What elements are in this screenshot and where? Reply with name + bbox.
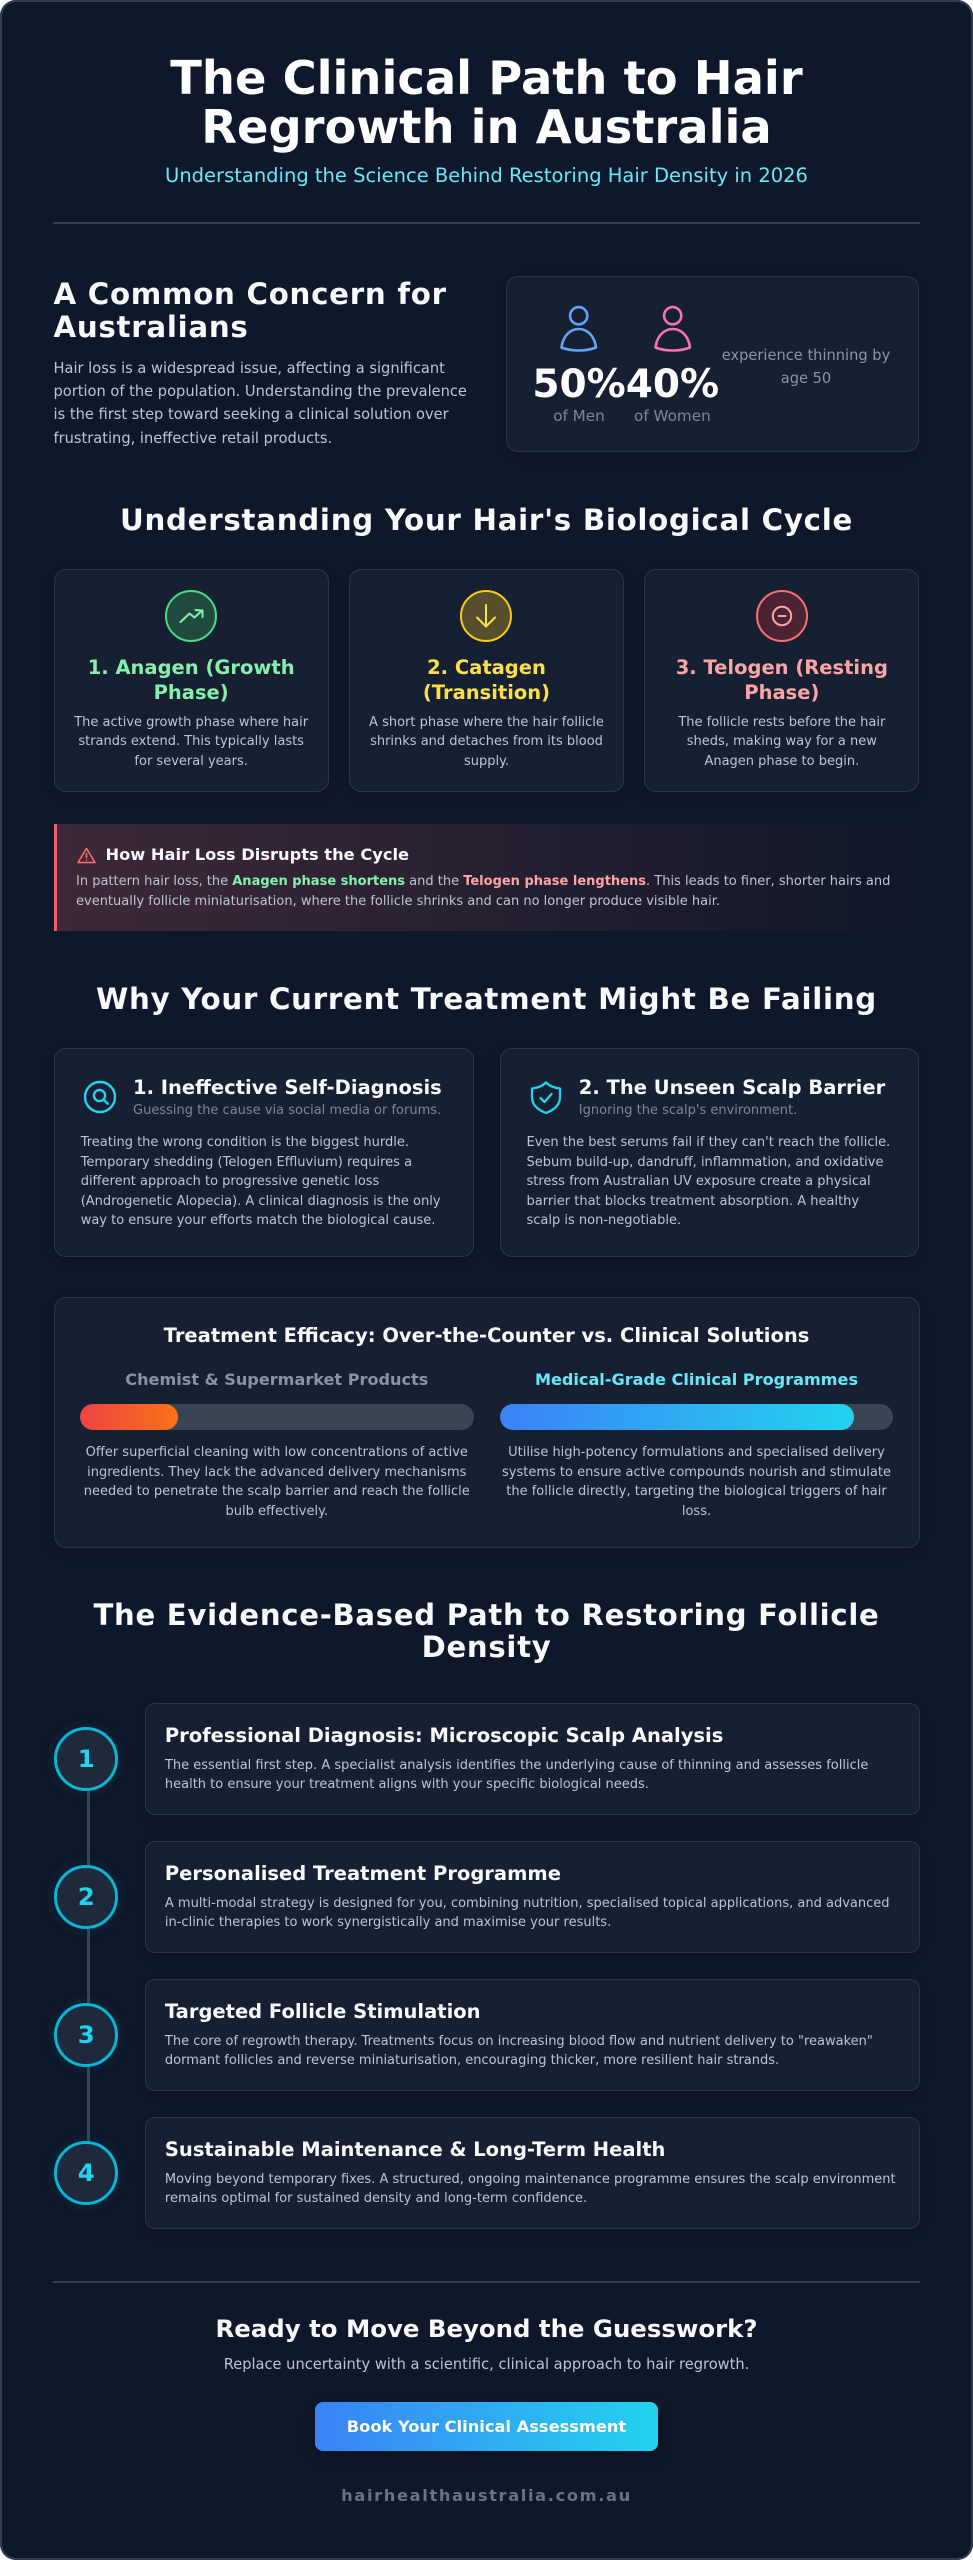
- text: anagen: strands extend. This typically lasts: [78, 734, 304, 749]
- text: chemist products: bulb effectively.: [226, 1504, 328, 1518]
- text: self-diagnosis: Temporary shedding (Telogen Effluvium) requires a: [81, 1154, 412, 1170]
- text: telogen: [678, 715, 886, 769]
- cta heading: Ready to Move Beyond the Guesswork?: [216, 2314, 757, 2343]
- paragraph: prevalence: [54, 360, 467, 447]
- label: chemist products: Chemist & Supermarket Products: [125, 1370, 428, 1389]
- step number 2: 2: [78, 1882, 95, 1911]
- text: clinical programmes: loss.: [682, 1504, 711, 1518]
- text: clinical programmes: Utilise high-potency formulations and specialised delivery: [508, 1445, 885, 1460]
- step 1 text: health to ensure your treatment aligns with your specific biological needs.: [165, 1777, 649, 1792]
- panel: ineffective self-diagnosis: [54, 1048, 474, 1257]
- step 3 heading: Targeted Follicle Stimulation: [165, 2000, 481, 2023]
- text: clinical programmes: the follicle directly, targeting the biological triggers of hair: [506, 1484, 887, 1499]
- bar: chemist efficacy: [80, 1404, 474, 1430]
- text: catagen: supply.: [464, 754, 509, 769]
- text: catagen: [369, 715, 604, 769]
- text: clinical programmes: [502, 1445, 891, 1518]
- heading: catagen: (Transition): [423, 681, 550, 704]
- paragraph: prevalence: Hair loss is a widespread issue, affecting a significant: [54, 360, 445, 376]
- text: anagen: for several years.: [134, 754, 248, 769]
- paragraph: prevalence: is the first step toward seeking a clinical solution over: [54, 406, 449, 423]
- step number 3: 3: [78, 2020, 95, 2049]
- heading: anagen: [88, 656, 295, 704]
- text: catagen: shrinks and detaches from its blood: [370, 734, 603, 749]
- panel: prevalence stats: [506, 276, 919, 452]
- text: self-diagnosis: different approach to progressive genetic loss: [81, 1174, 379, 1189]
- heading: a common concern: Australians: [54, 310, 249, 344]
- heading: a common concern: A Common Concern for: [54, 277, 447, 311]
- title: The Clinical Path to Hair: [170, 51, 803, 105]
- step number 1: [54, 1727, 118, 1791]
- icon: warning triangle: [77, 848, 96, 864]
- heading: evidence-based path: The Evidence-Based Path to Restoring Follicle: [93, 1598, 880, 1632]
- label: clinical programmes: Medical-Grade Clinical Programmes: [535, 1370, 858, 1389]
- callout text: In pattern hair loss, the Anagen phase shortens and the Telogen phase lengthens. This leads to finer, shorter hairs and: [76, 874, 890, 889]
- step 3 text: [164, 2034, 873, 2068]
- heading: anagen: 1. Anagen (Growth: [88, 656, 295, 679]
- text: chemist products: needed to penetrate the scalp barrier and reach the follicle: [84, 1484, 470, 1499]
- step card 4: [144, 2117, 920, 2229]
- timeline: four steps: [54, 1703, 920, 2229]
- text: anagen: [74, 715, 308, 769]
- heading: scalp barrier: 2. The Unseen Scalp Barrier: [579, 1076, 885, 1099]
- text: self-diagnosis: (Androgenetic Alopecia). A clinical diagnosis is the only: [81, 1194, 441, 1208]
- caption: experience thinning: [722, 347, 890, 387]
- panel: unseen scalp barrier: [500, 1048, 919, 1257]
- step number 2: [54, 1865, 118, 1929]
- step 1 text: The essential first step. A specialist analysis identifies the underlying cause of thinning and assesses follicle: [165, 1758, 868, 1773]
- heading: anagen: Phase): [154, 681, 229, 704]
- heading: catagen: 2. Catagen: [427, 656, 546, 679]
- step number 4: 4: [78, 2158, 95, 2187]
- step card 1: [144, 1703, 920, 1815]
- caption: experience thinning: experience thinning by: [722, 347, 890, 364]
- step 4 text: Moving beyond temporary fixes. A structured, ongoing maintenance programme ensures the scalp environment: [165, 2172, 896, 2187]
- text block: a common concern: [54, 277, 467, 447]
- number: 50 percent: 50%: [532, 362, 626, 407]
- step 1 text: [164, 1758, 868, 1792]
- website footer: hairhealthaustralia.com.au: [341, 2486, 632, 2505]
- step 2 text: A multi-modal strategy is designed for you, combining nutrition, specialised topical applications, and advanced: [165, 1896, 890, 1911]
- text: scalp barrier: barrier that blocks treatment absorption. A healthy: [526, 1194, 859, 1208]
- bar: clinical efficacy: [500, 1404, 893, 1430]
- icon: rest circle: [756, 590, 808, 642]
- text: chemist products: [84, 1445, 470, 1518]
- text: anagen: The active growth phase where hair: [74, 715, 308, 730]
- number: 40 percent: 40%: [626, 362, 719, 407]
- panel: telogen: [644, 569, 919, 792]
- text: self-diagnosis: [80, 1135, 441, 1228]
- text: scalp barrier: Even the best serums fail if they can't reach the follicle.: [526, 1135, 890, 1150]
- call to action: [216, 2314, 757, 2505]
- step 4 text: [165, 2172, 896, 2206]
- title: Regrowth in Australia: [201, 100, 772, 154]
- text: chemist products: Offer superficial cleaning with low concentrations of active: [86, 1445, 468, 1460]
- cta button: [315, 2402, 658, 2451]
- step number 3: [54, 2003, 118, 2067]
- stat: men: [532, 306, 626, 425]
- icon: magnifier: [84, 1080, 116, 1114]
- heading: why treatment fails: Why Your Current Treatment Might Be Failing: [96, 982, 877, 1016]
- heading: catagen: [423, 656, 550, 704]
- callout: how hair loss disrupts the cycle: [54, 824, 920, 931]
- stat: women: [626, 306, 719, 425]
- callout text: [76, 874, 890, 909]
- step 2 text: [165, 1896, 890, 1930]
- icon: woman: [654, 306, 692, 352]
- callout text: eventually follicle miniaturisation, where the follicle shrinks and can no longer produce visible hair.: [76, 894, 720, 909]
- heading: a common concern: [54, 277, 447, 344]
- step 4 heading: Sustainable Maintenance & Long-Term Health: [165, 2138, 665, 2161]
- step 3 text: The core of regrowth therapy. Treatments focus on increasing blood flow and nutrient delivery to "reawaken": [165, 2034, 873, 2049]
- paragraph: prevalence: frustrating, ineffective retail products.: [54, 430, 332, 447]
- text: catagen: A short phase where the hair follicle: [369, 715, 604, 730]
- step number 1: 1: [78, 1744, 95, 1773]
- text: self-diagnosis: way to ensure your efforts match the biological cause.: [81, 1213, 435, 1228]
- subheading: self-diagnosis: Guessing the cause via social media or forums.: [133, 1102, 441, 1118]
- cta text: Replace uncertainty with a scientific, clinical approach to hair regrowth.: [224, 2356, 749, 2373]
- text: telogen: sheds, making way for a new: [687, 734, 877, 749]
- step 2 heading: Personalised Treatment Programme: [165, 1862, 561, 1885]
- text: telogen: Anagen phase to begin.: [704, 754, 859, 769]
- label: of women: of Women: [634, 407, 711, 425]
- text: clinical programmes: systems to ensure active compounds nourish and stimulate: [502, 1464, 891, 1480]
- panel: anagen: [54, 569, 329, 792]
- text: scalp barrier: Sebum build-up, dandruff, inflammation, and oxidative: [526, 1154, 883, 1170]
- cta button: Book Your Clinical Assessment: [347, 2417, 626, 2436]
- text: chemist products: ingredients. They lack the advanced delivery mechanisms: [87, 1464, 466, 1480]
- title: [170, 51, 803, 154]
- step card 3: [144, 1979, 920, 2091]
- step 1 heading: Professional Diagnosis: Microscopic Scalp Analysis: [165, 1724, 723, 1747]
- heading: telogen: Phase): [744, 681, 819, 704]
- text: scalp barrier: [526, 1135, 890, 1228]
- heading: telogen: 3. Telogen (Resting: [676, 656, 888, 679]
- icon: shield check: [530, 1081, 562, 1114]
- text: scalp barrier: stress from Australian UV exposure create a physical: [526, 1174, 871, 1189]
- step 3 text: dormant follicles and reverse miniaturisation, encouraging thicker, more resilient hair strands.: [165, 2053, 779, 2068]
- heading: self-diagnosis: 1. Ineffective Self-Diagnosis: [133, 1076, 442, 1099]
- heading: evidence-based path: [93, 1598, 880, 1664]
- heading: telogen: [676, 656, 888, 704]
- callout heading: How Hair Loss Disrupts the Cycle: [106, 845, 409, 864]
- heading: treatment efficacy: Treatment Efficacy: Over-the-Counter vs. Clinical Solutions: [164, 1324, 809, 1347]
- icon: arrow down: [460, 590, 512, 642]
- icon: trending up: [165, 590, 217, 642]
- step 4 text: remains optimal for sustained density and long-term confidence.: [165, 2191, 587, 2206]
- icon: man: [560, 306, 598, 352]
- text: telogen: The follicle rests before the hair: [678, 715, 885, 730]
- paragraph: prevalence: portion of the population. Understanding the prevalence: [54, 383, 467, 400]
- panel: catagen: [349, 569, 624, 792]
- label: of men: of Men: [553, 407, 605, 425]
- heading: biological cycle: Understanding Your Hair's Biological Cycle: [120, 503, 853, 537]
- step card 2: [144, 1841, 920, 1953]
- heading: evidence-based path: Density: [422, 1630, 551, 1664]
- subtitle: Understanding the Science Behind Restoring Hair Density in 2026: [165, 164, 808, 187]
- caption: experience thinning: age 50: [781, 370, 831, 387]
- step 2 text: in-clinic therapies to work synergistically and maximise your results.: [165, 1915, 611, 1930]
- text: scalp barrier: scalp is non-negotiable.: [526, 1213, 681, 1228]
- panel: treatment efficacy comparison: [54, 1297, 920, 1548]
- subheading: scalp barrier: Ignoring the scalp's environment.: [579, 1102, 797, 1118]
- step number 4: [54, 2141, 118, 2205]
- text: self-diagnosis: Treating the wrong condition is the biggest hurdle.: [81, 1135, 409, 1150]
